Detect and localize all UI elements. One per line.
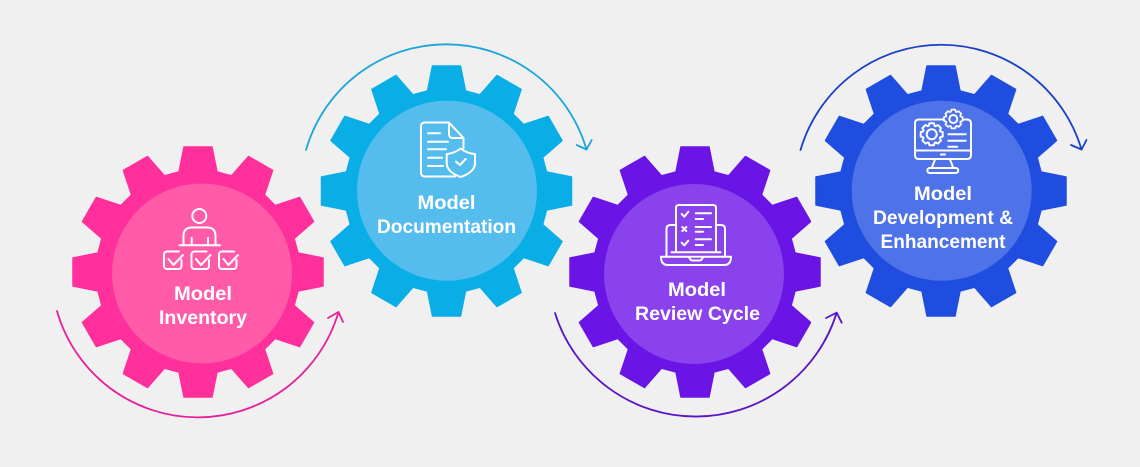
gear: pink <box>73 147 323 397</box>
label: Model <box>914 184 972 205</box>
icon: monitor with gears <box>915 110 971 173</box>
label: Model <box>174 284 232 305</box>
gear: purple <box>570 147 820 397</box>
label: Model <box>668 280 726 301</box>
label <box>635 280 760 325</box>
label: Review Cycle <box>635 304 760 325</box>
label: Model <box>418 193 476 214</box>
inner circle <box>604 184 784 364</box>
label <box>873 184 1013 253</box>
icon: document with shield <box>421 122 475 177</box>
label: Enhancement <box>880 232 1006 253</box>
panel: Model Review Cycle <box>555 147 842 417</box>
icon: person with checklist <box>164 209 238 269</box>
label: Development & <box>873 208 1013 229</box>
panel: Model Documentation <box>306 44 592 316</box>
inner circle <box>112 184 292 364</box>
label: Documentation <box>377 217 516 238</box>
panel: Model Inventory <box>57 147 343 417</box>
label: Inventory <box>159 308 247 329</box>
arrow: blue arc <box>800 45 1086 150</box>
panel: Model Development & Enhancement <box>800 45 1086 316</box>
inner circle <box>852 101 1032 281</box>
arrow: purple arc <box>555 313 842 417</box>
label <box>159 284 247 329</box>
icon: laptop with checklist <box>661 205 731 265</box>
arrow: pink arc <box>57 311 343 417</box>
inner circle <box>357 101 537 281</box>
gear: blue <box>816 66 1066 316</box>
gear: cyan <box>322 66 572 316</box>
arrow: cyan arc <box>306 44 592 150</box>
label <box>377 193 516 238</box>
